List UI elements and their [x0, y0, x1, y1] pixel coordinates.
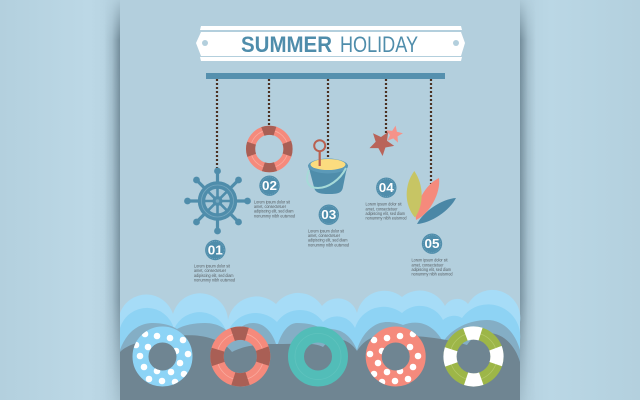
badge 02: 02	[262, 179, 277, 193]
waves	[120, 290, 520, 400]
text 01: adipiscing elit, sed diam	[194, 273, 234, 278]
text 02: nonummy nibh euismod	[254, 213, 295, 218]
wave layer 3	[120, 320, 520, 400]
pool rings row	[133, 331, 497, 385]
step 02	[254, 176, 295, 218]
ring: green and white	[450, 333, 497, 380]
icon: ship wheel	[184, 168, 251, 234]
text 01: nonummy nibh euismod	[194, 278, 235, 283]
icon: starfish	[370, 126, 403, 156]
hanging bar	[206, 73, 445, 79]
step 03	[308, 204, 349, 247]
text 03: Lorem ipsum dolor sit	[308, 228, 345, 233]
text 03: adipiscing elit, sed diam	[308, 238, 348, 243]
badge 01: 01	[208, 244, 223, 258]
panel: poster	[120, 0, 520, 400]
ring: coral polka dot	[367, 331, 421, 385]
infographic canvas	[108, 0, 533, 400]
badge 05: 05	[424, 237, 440, 251]
chains	[217, 79, 431, 184]
text 04: adipiscing elit, sed diam	[366, 211, 405, 216]
wave layer 4	[120, 333, 520, 400]
icon: surfboards	[407, 171, 456, 224]
wave layer 1	[120, 290, 520, 400]
title: SUMMER	[241, 32, 332, 57]
ring: teal	[295, 334, 341, 380]
text 03: amet, consectetuer	[308, 233, 340, 238]
text 02: amet, consectetuer	[254, 204, 286, 209]
step 04	[366, 178, 407, 221]
text 02: Lorem ipsum dolor sit	[254, 199, 291, 204]
wave layer 2	[120, 304, 520, 400]
text 02: adipiscing elit, sed diam	[254, 209, 294, 214]
icon: sand bucket and shovel	[307, 140, 348, 194]
text 05: adipiscing elit, sed diam	[412, 267, 451, 272]
text 01: amet, consectetuer	[194, 268, 226, 273]
title: HOLIDAY	[340, 32, 418, 57]
ring: coral life ring	[217, 333, 264, 380]
title banner	[196, 26, 465, 61]
text 04: Lorem ipsum dolor sit	[366, 202, 402, 207]
text 05: Lorem ipsum dolor sit	[412, 258, 448, 263]
step 05	[412, 234, 453, 277]
text 05: amet, consectetuer	[412, 262, 444, 267]
text 03: nonummy nibh euismod	[308, 242, 349, 247]
icon: life ring	[251, 130, 288, 168]
badge 04: 04	[379, 181, 394, 195]
text 04: nonummy nibh euismod	[366, 216, 407, 221]
ring: blue polka dot	[133, 331, 191, 385]
text 04: amet, consectetuer	[366, 206, 398, 211]
panel shadow	[104, 0, 536, 400]
text 05: nonummy nibh euismod	[412, 272, 453, 277]
text 01: Lorem ipsum dolor sit	[194, 264, 231, 268]
step 01	[194, 240, 235, 283]
badge 03: 03	[321, 208, 336, 222]
